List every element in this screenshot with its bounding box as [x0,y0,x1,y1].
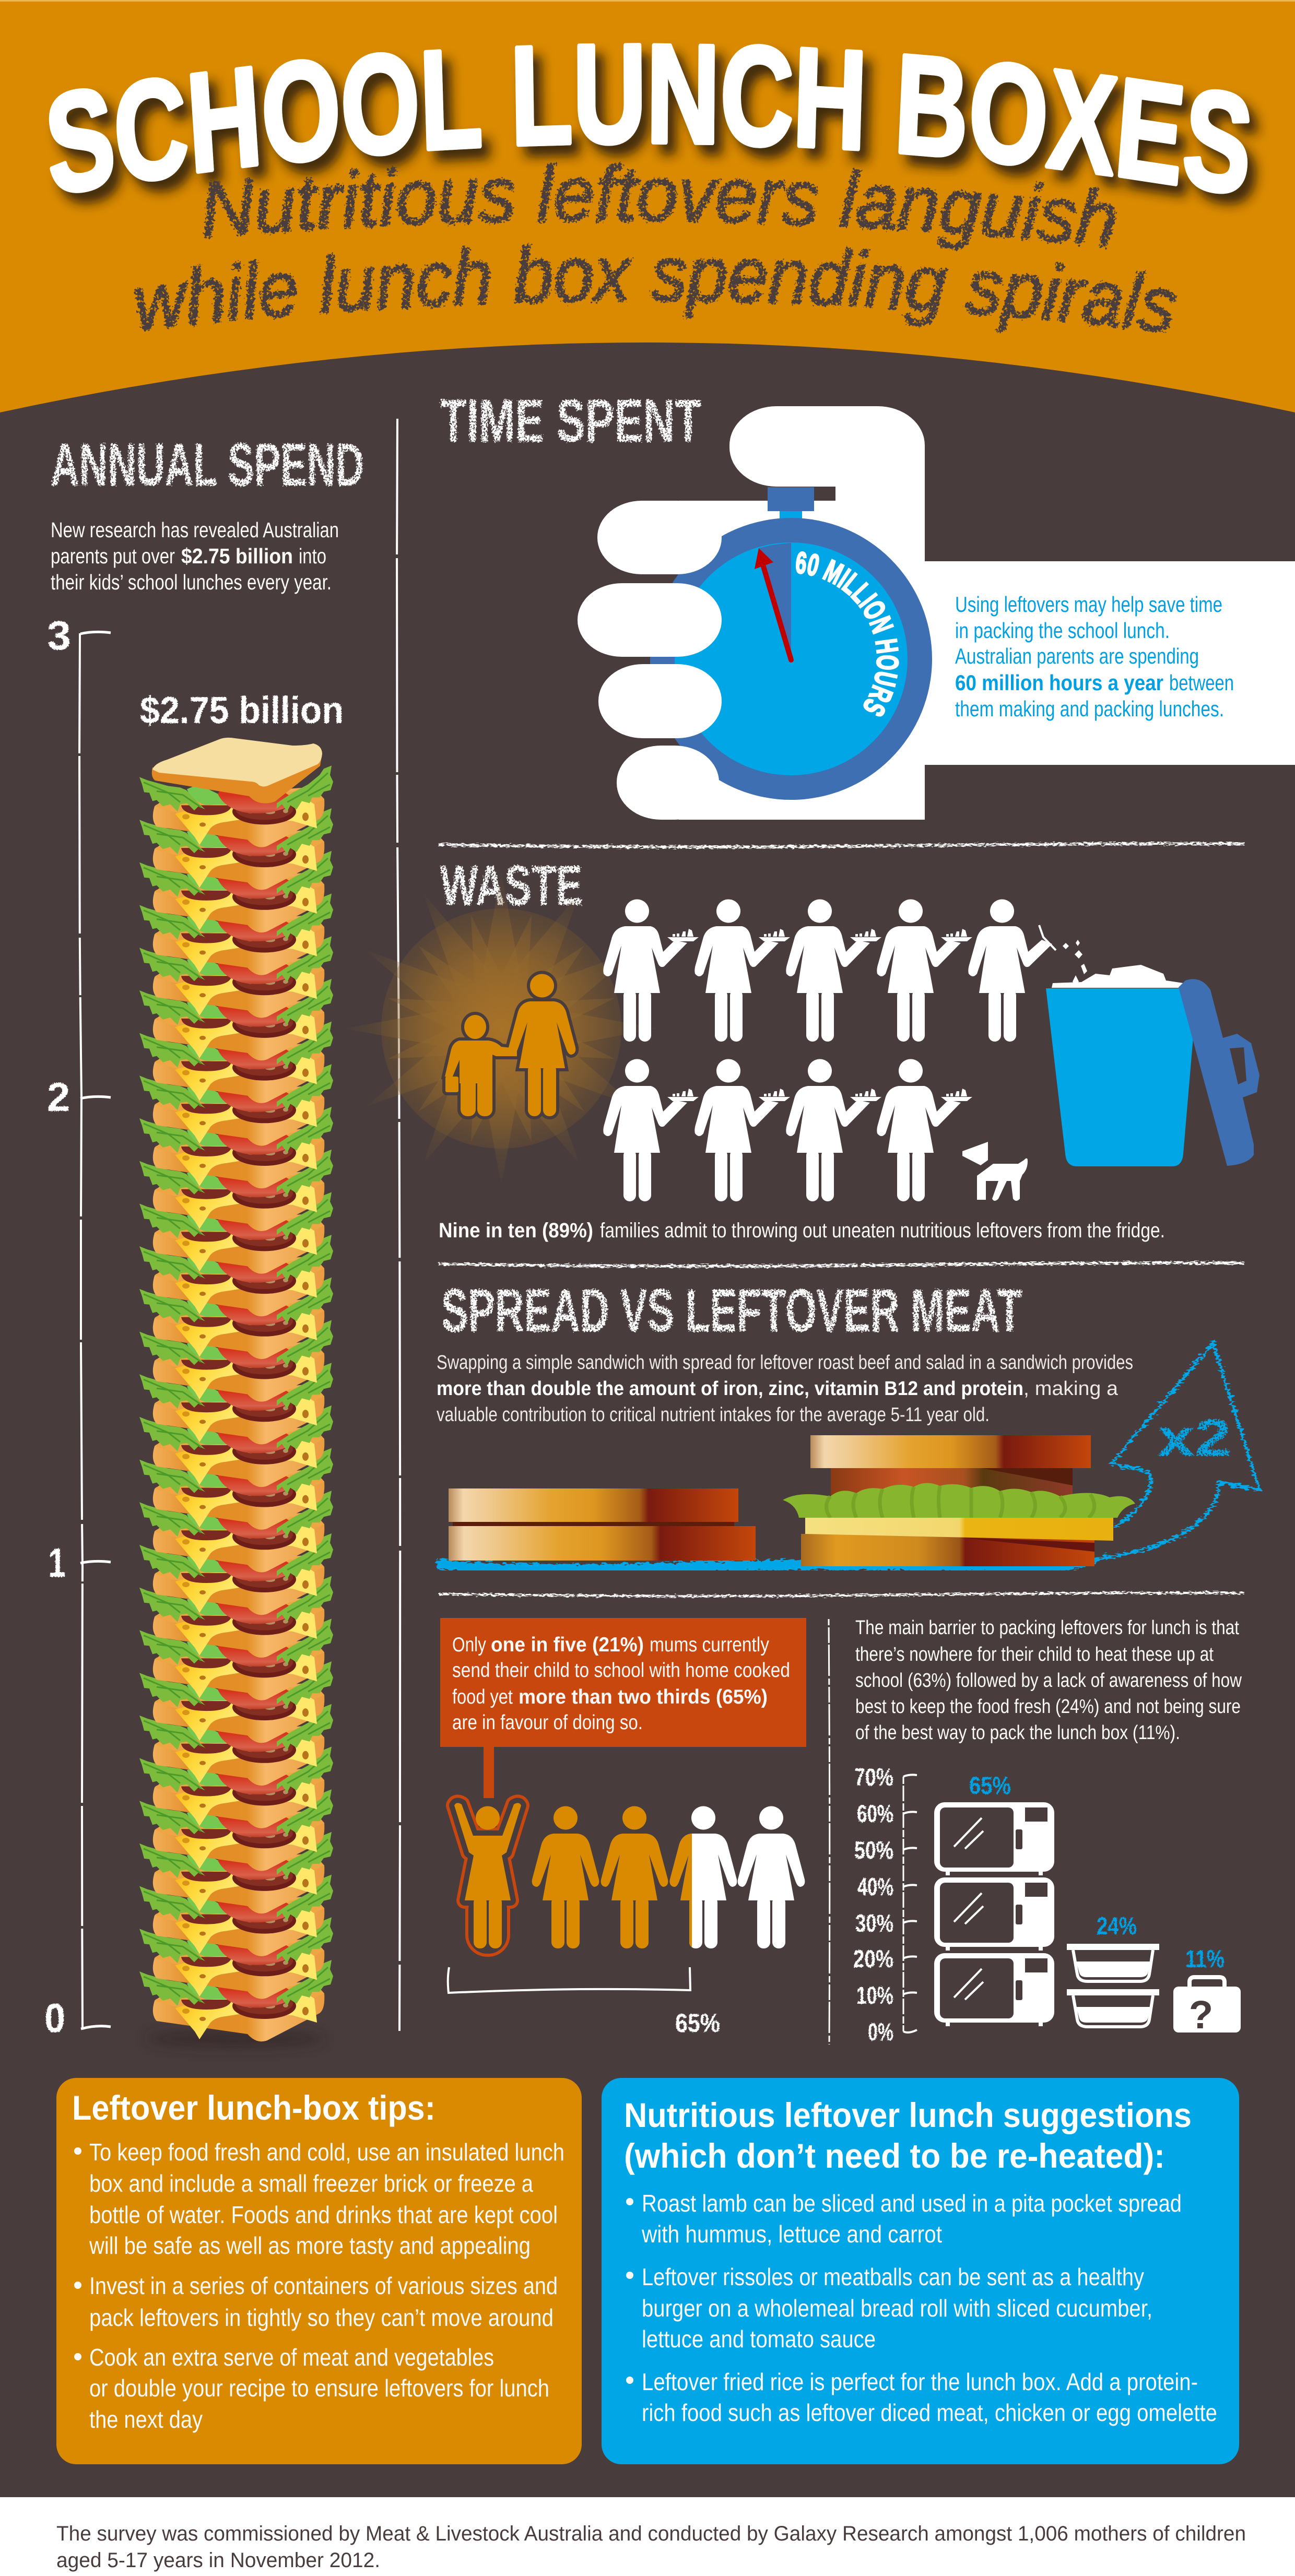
time spent text: Using leftovers may help save time [955,592,1222,617]
percent axis: 10% [856,1981,893,2009]
caption [439,1219,1165,1242]
sandwich with spread [449,1488,756,1561]
icon: mother and child [445,974,575,1116]
suggestions list: Roast lamb can be sliced and used in a pita pocket spread [642,2190,1182,2217]
comparison text [437,1352,1133,1426]
footer: aged 5-17 years in November 2012. [56,2549,380,2572]
suggestions heading: (which don’t need to be re-heated): [624,2136,1165,2175]
suggestions heading: Nutritious leftover lunch suggestions [624,2096,1192,2134]
percent axis: 50% [854,1836,893,1864]
stopwatch: 60 MILLION HOURS [796,551,899,716]
tips list [74,2138,564,2433]
icon: dog [962,1142,1028,1201]
sunburst [345,872,658,1185]
suggestions heading [624,2096,1192,2175]
tips list: box and include a small freezer brick or freeze a [89,2170,533,2197]
time spent text: them making and packing lunches. [955,696,1224,721]
callout box: one in five (21%) [491,1634,644,1656]
65% label: 65% [675,2008,720,2038]
time spent text: 60 million hours a year [955,670,1163,695]
caption: Nine in ten (89%) [439,1219,593,1242]
callout box: are in favour of doing so. [452,1711,643,1734]
bracket [448,1967,690,1993]
tips list: the next day [89,2406,203,2433]
icon column: lunch box question: ? [1189,1993,1213,2037]
panel: waste [345,854,1259,1242]
comparison text: valuable contribution to critical nutrient intakes for the average 5-11 year old. [437,1404,990,1426]
title: SCHOOL LUNCH BOXES [40,15,1258,225]
tips list: bottle of water. Foods and drinks that are kept cool [89,2201,558,2228]
suggestions list: with hummus, lettuce and carrot [641,2220,942,2248]
time spent text: between [1169,670,1234,695]
barriers text: there’s nowhere for their child to heat these up at [855,1644,1214,1665]
icon column: containers [1067,1912,1159,2027]
icon column: containers: 24% [1097,1912,1137,1940]
intro text: New research has revealed Australian [51,518,339,542]
icon column: lunch box question: 11% [1185,1945,1225,1972]
subtitle: Nutritious leftovers languish [203,161,1117,252]
callout box: send their child to school with home cooked [452,1659,790,1682]
percent axis: 20% [853,1945,893,1972]
suggestions list: lettuce and tomato sauce [642,2325,876,2353]
panel: time spent [440,387,1295,820]
stopwatch [650,518,932,800]
heading: annual spend: ANNUAL SPEND [51,431,364,499]
tips list: Cook an extra serve of meat and vegetables [89,2344,494,2371]
panel: annual spend [44,431,364,2048]
suggestions list: burger on a wholemeal bread roll with sliced cucumber, [642,2295,1152,2322]
comparison text: more than double the amount of iron, zinc, vitamin B12 and protein [437,1378,1023,1400]
blue chalk arrow: x2 [1158,1409,1231,1467]
value label: $2.75 billion [140,690,344,731]
tips list: or double your recipe to ensure leftovers for lunch [89,2374,549,2402]
callout box [440,1618,806,1798]
panel: lunch suggestions [602,2078,1239,2464]
icon column: microwaves: 65% [969,1771,1011,1799]
heading: time spent: TIME SPENT [440,387,701,455]
barriers text [855,1617,1242,1744]
suggestions list: Leftover fried rice is perfect for the lunch box. Add a protein- [642,2368,1198,2395]
women pictogram [454,1803,805,1948]
chart axis: 2 [47,1074,70,1120]
intro text: $2.75 billion [181,544,293,568]
tips list: will be safe as well as more tasty and appealing [89,2232,531,2259]
intro text: parents put over [51,544,175,568]
heading: waste: WASTE [440,854,583,917]
time spent text [955,592,1234,721]
sandwich tower [139,738,333,2048]
header banner [0,0,1295,412]
percent axis: 0% [868,2018,893,2046]
callout box: mums currently [650,1634,769,1656]
percent axis: 70% [854,1763,893,1791]
tips list: Invest in a series of containers of various sizes and [89,2272,558,2299]
barriers text: of the best way to pack the lunch box (11%). [855,1722,1180,1744]
percent axis [853,1763,917,2046]
footer [0,2497,1295,2576]
icon column: lunch box question [1173,1945,1241,2037]
percent axis: 60% [857,1800,893,1827]
caption: families admit to throwing out uneaten nutritious leftovers from the fridge. [600,1219,1165,1242]
callout box: more than two thirds (65%) [519,1686,768,1708]
white info band [925,561,1295,765]
chart axis [44,612,111,2041]
chart axis: 3 [47,612,71,658]
suggestions list: Leftover rissoles or meatballs can be sent as a healthy [642,2263,1144,2290]
vertical divider [397,419,400,2031]
panel: spread vs leftover meat [437,1277,1259,1569]
heading: spread vs leftover meat: SPREAD VS LEFTOVER MEAT [441,1277,1022,1344]
subtitle: while lunch box spending spirals [134,242,1178,334]
callout box: food yet [452,1686,513,1708]
blue chalk arrow [437,1343,1259,1569]
intro text: their kids’ school lunches every year. [51,570,332,594]
chart axis: 1 [48,1540,66,1586]
suggestions list [626,2190,1217,2426]
divider between lower panels [829,1619,830,2045]
tips list: To keep food fresh and cold, use an insulated lunch [89,2138,564,2166]
icon: rubbish bin [1046,965,1259,1166]
women with leftovers, row 1 [603,899,1087,1042]
panel: leftover tips [56,2078,582,2464]
time spent text: in packing the school lunch. [955,618,1170,643]
time spent text: Australian parents are spending [955,644,1199,668]
tips heading: Leftover lunch-box tips: [72,2088,435,2127]
percent axis: 30% [855,1909,893,1937]
tips list: pack leftovers in tightly so they can’t move around [89,2304,554,2331]
sandwich with leftover meat [783,1435,1135,1566]
chart axis: 0 [44,1995,65,2041]
panel: mums callout [440,1618,806,2038]
subtitle [128,149,1181,350]
intro text: into [299,544,326,568]
icon: hand holding stopwatch [578,406,932,820]
icon column: microwaves [934,1771,1054,2026]
suggestions list: rich food such as leftover diced meat, chicken or egg omelette [642,2399,1217,2426]
panel: barriers [853,1617,1242,2046]
percent axis: 40% [857,1873,893,1900]
comparison text: , making a [1023,1378,1119,1400]
intro text [51,518,339,594]
women with leftovers, row 2 [603,1059,972,1201]
comparison text: Swapping a simple sandwich with spread for leftover roast beef and salad in a sandwich provides [437,1352,1133,1374]
footer: The survey was commissioned by Meat & Livestock Australia and conducted by Galaxy Research amongst 1,006 mothers of children [56,2522,1246,2545]
callout box: Only [452,1634,486,1656]
